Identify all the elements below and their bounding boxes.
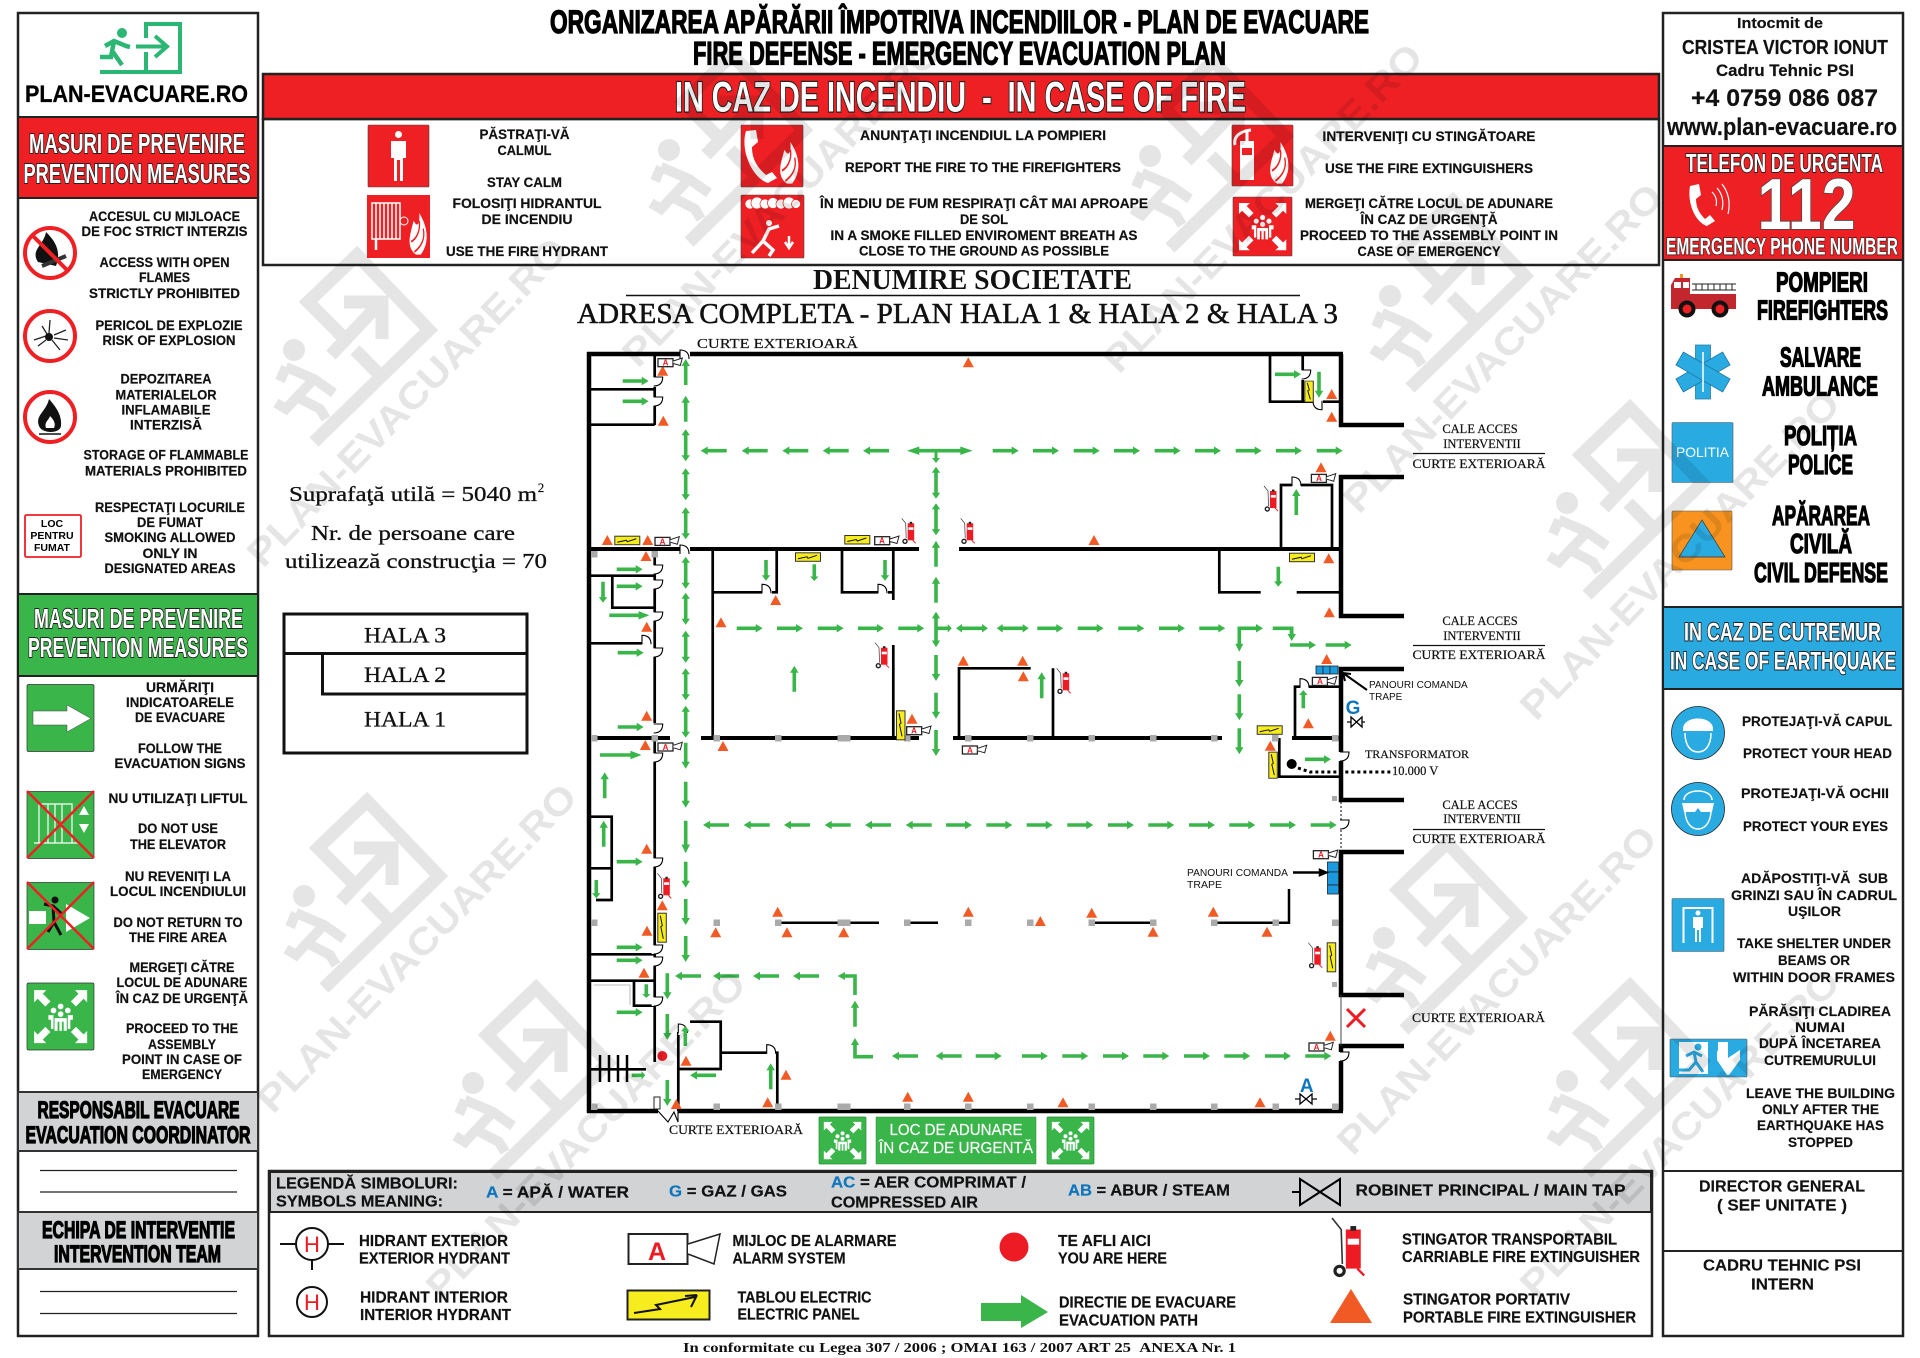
text: protect head — [1742, 714, 1892, 761]
watermark overlay: PLAN-EVACUARE.RO — [614, 30, 951, 375]
arrow to control panels right — [1343, 673, 1367, 690]
text: follow the signs: DE EVACUARE — [135, 710, 225, 725]
text: assembly: ÎN CAZ DE URGENŢĂ — [1360, 212, 1498, 227]
title: FIRE DEFENSE - EMERGENCY EVACUATION PLAN — [693, 36, 1226, 72]
label: access route 2: INTERVENTII — [1443, 629, 1521, 643]
text: follow the signs: URMĂRIŢI — [146, 680, 214, 695]
text: stay calm: STAY CALM — [487, 175, 562, 190]
text: portable extinguisher: STINGATOR PORTATIV — [1403, 1292, 1570, 1308]
alarm symbols: A — [660, 538, 666, 546]
text: leave building: NUMAI — [1795, 1020, 1845, 1035]
text: take shelter: GRINZI SAU ÎN CADRUL — [1731, 888, 1897, 903]
text: use hydrant: USE THE FIRE HYDRANT — [446, 244, 609, 259]
watermark overlay: PLAN-EVACUARE.RO — [418, 963, 755, 1308]
text: transportable extinguisher: CARRIABLE FIRE EXTINGUISHER — [1402, 1249, 1640, 1266]
label: access route 1: CALE ACCES — [1442, 422, 1518, 436]
text: leave building: CUTREMURULUI — [1764, 1053, 1876, 1068]
watermark overlay: PLAN-EVACUARE.RO — [1095, 36, 1432, 381]
text: open flames prohibited: STRICTLY PROHIBITED — [89, 286, 240, 301]
legend header text — [276, 1174, 1626, 1212]
text: assembly point: LOCUL DE ADUNARE — [116, 975, 248, 990]
text: stay calm — [480, 127, 570, 190]
text: interior hydrant: HIDRANT INTERIOR — [360, 1290, 508, 1306]
text: smoking areas: SMOKING ALLOWED — [104, 530, 236, 545]
alarm symbols: A — [967, 746, 973, 755]
text: building stats — [285, 480, 547, 573]
heading: earthquake — [1663, 607, 1903, 689]
text: interior hydrant — [360, 1290, 511, 1324]
label: bottom courtyard: CURTE EXTERIOARĂ — [669, 1122, 804, 1137]
alarm symbols: A — [1316, 474, 1322, 483]
text: open flames prohibited: ACCESS WITH OPEN — [100, 255, 230, 270]
assembly point banner: ÎN CAZ DE URGENTĂ — [878, 1140, 1034, 1157]
alarm symbols: A — [911, 726, 917, 736]
text: protect head: PROTECT YOUR HEAD — [1743, 746, 1892, 761]
icon: assembly sign left — [819, 1117, 866, 1164]
watermark overlay: PLAN-EVACUARE.RO — [1512, 961, 1849, 1306]
text: smoke guidance — [819, 196, 1148, 258]
icon: door frame — [1672, 898, 1724, 952]
icon: do not return — [27, 882, 94, 950]
text: police: POLICE — [1788, 449, 1853, 480]
panel: in case of fire — [263, 74, 1659, 265]
watermark overlay — [239, 30, 1849, 1308]
label: access route 3: CURTE EXTERIOARĂ — [1412, 832, 1546, 846]
heading: intervention team: ECHIPA DE INTERVENTIE — [42, 1217, 235, 1244]
icon: assembly point — [27, 983, 94, 1050]
icon: smoking place sign: LOC — [41, 518, 63, 530]
label: access route 1 — [1412, 422, 1546, 471]
signature lines: coordinator — [40, 1170, 237, 1192]
text: ambulance: SALVARE — [1780, 342, 1861, 372]
icon: electric panel — [628, 1290, 710, 1320]
author block: +4 0759 086 087 — [1691, 85, 1878, 112]
heading rule — [626, 294, 1300, 296]
text: transportable extinguisher: STINGATOR TRANSPORTABIL — [1402, 1232, 1617, 1248]
label: access route 2 — [1412, 614, 1546, 662]
text: flammable storage: INFLAMABILE — [122, 402, 210, 418]
text: use extinguishers — [1322, 129, 1536, 176]
logo: exit sign — [100, 24, 180, 72]
you are here dot — [657, 1051, 667, 1061]
section: director: DIRECTOR GENERAL — [1699, 1178, 1865, 1196]
text: smoke guidance: CLOSE TO THE GROUND AS POSSIBLE — [859, 244, 1109, 258]
text: do not return: THE FIRE AREA — [129, 930, 227, 945]
text: explosion risk: PERICOL DE EXPLOZIE — [96, 318, 242, 333]
icon: civil defense — [1672, 511, 1732, 570]
signature lines: team — [40, 1292, 237, 1314]
text: you are here: YOU ARE HERE — [1058, 1250, 1167, 1268]
text: ambulance — [1762, 342, 1878, 402]
heading: red prevention measures — [18, 117, 258, 198]
heading: green prevention measures — [18, 594, 258, 676]
valve: air — [1295, 1076, 1317, 1104]
label: access route 2: CALE ACCES — [1442, 614, 1518, 628]
label: access route 3 — [1412, 798, 1546, 846]
text: firefighters — [1757, 266, 1888, 326]
assembly point banner — [876, 1117, 1036, 1164]
text: portable extinguisher: PORTABLE FIRE EXTINGUISHER — [1403, 1310, 1636, 1326]
heading: intervention team: INTERVENTION TEAM — [54, 1241, 221, 1268]
text: use extinguishers: INTERVENIŢI CU STINGĂTOARE — [1322, 129, 1536, 144]
text: assembly: PROCEED TO THE ASSEMBLY POINT IN — [1300, 228, 1558, 243]
panel: legend — [269, 1171, 1652, 1336]
heading: green prevention measures: PREVENTION MEASURES — [28, 632, 248, 663]
icon: assembly sign right — [1047, 1117, 1094, 1164]
emergency phone block — [1663, 146, 1903, 260]
icon: flammable — [25, 392, 75, 442]
watermark overlay: PLAN-EVACUARE.RO — [1335, 176, 1672, 521]
text: portable extinguisher — [1403, 1292, 1636, 1326]
alarm symbols: A — [663, 358, 669, 368]
text: interior hydrant: INTERIOR HYDRANT — [360, 1307, 511, 1324]
text: assembly: MERGEŢI CĂTRE LOCUL DE ADUNARE — [1305, 196, 1553, 211]
author block — [1666, 16, 1897, 141]
author block: www.plan-evacuare.ro — [1666, 114, 1897, 141]
icon: exterior hydrant: H — [304, 1232, 320, 1257]
text: building stats: 2 — [538, 480, 544, 495]
transformer: TRANSFORMATOR — [1365, 747, 1469, 761]
text: exterior hydrant: HIDRANT EXTERIOR — [359, 1233, 508, 1250]
legend header text: A = APĂ / WATER — [486, 1182, 629, 1202]
text: police: POLIȚIA — [1784, 420, 1857, 451]
icon: phone — [741, 125, 803, 187]
text: take shelter: TAKE SHELTER UNDER — [1737, 936, 1891, 951]
heading: green prevention measures: MASURI DE PREVENIRE — [34, 603, 243, 634]
text: flammable storage — [84, 372, 248, 478]
text: do not return: LOCUL INCENDIULUI — [110, 884, 246, 899]
text: protect eyes: PROTEJAŢI-VĂ OCHII — [1741, 786, 1889, 801]
text: building stats: Nr. de persoane care — [311, 521, 515, 545]
heading: evacuation coordinator — [18, 1092, 258, 1151]
legend header bar — [270, 1172, 1651, 1212]
icon: main tap — [1292, 1179, 1340, 1205]
icon: evacuation arrow — [981, 1295, 1048, 1328]
text: you are here — [1058, 1233, 1167, 1268]
icon: police — [1672, 422, 1733, 482]
heading: red prevention measures: PREVENTION MEASURES — [24, 158, 250, 189]
text: leave building: EARTHQUAKE HAS — [1757, 1118, 1884, 1133]
address heading: ADRESA COMPLETA - PLAN HALA 1 & HALA 2 & HALA 3 — [577, 299, 1338, 330]
section: director — [1663, 1171, 1903, 1214]
valve: air: A — [1300, 1076, 1314, 1097]
legend header text: G = GAZ / GAS — [669, 1184, 787, 1200]
icon: exit down — [1670, 1039, 1747, 1077]
label: access route 3: INTERVENTII — [1443, 812, 1521, 826]
text: evacuation path: EVACUATION PATH — [1059, 1312, 1198, 1330]
icon: alarm: A — [648, 1238, 666, 1266]
text: flammable storage: DEPOZITAREA — [120, 372, 212, 386]
text: flammable storage: MATERIALS PROHIBITED — [85, 464, 247, 478]
emergency phone block: 112 — [1758, 165, 1856, 245]
icon: green arrow sign — [27, 684, 94, 752]
label: control panels right — [1369, 680, 1468, 703]
text: leave building: DUPĂ ÎNCETAREA — [1759, 1036, 1881, 1051]
icon: explosion risk — [25, 311, 75, 361]
legend header text: LEGENDĂ SIMBOLURI: — [276, 1174, 458, 1192]
text: take shelter — [1731, 871, 1897, 985]
red cross blocked exit — [1347, 1009, 1365, 1027]
icon: no open flames — [25, 228, 75, 278]
text: do not return: NU REVENIŢI LA — [125, 869, 231, 884]
icon: alarm — [628, 1234, 720, 1266]
label: access route 1: INTERVENTII — [1443, 437, 1521, 451]
text: electric panel: ELECTRIC PANEL — [738, 1306, 860, 1324]
text: alarm — [732, 1233, 897, 1268]
text: use hydrant: DE INCENDIU — [482, 212, 572, 227]
text: smoking areas: DE FUMAT — [137, 515, 204, 530]
text: stay calm: CALMUL — [498, 143, 552, 158]
watermark overlay: PLAN-EVACUARE.RO — [249, 776, 586, 1121]
floor plan doors — [642, 350, 1349, 1122]
icon: exterior hydrant — [280, 1228, 344, 1270]
text: open flames prohibited: DE FOC STRICT INTERZIS — [82, 224, 248, 239]
text: protect eyes — [1741, 786, 1889, 834]
text: smoke guidance: DE SOL — [960, 212, 1008, 227]
text: smoking areas — [95, 500, 245, 576]
heading: in case of fire band: IN CAZ DE INCENDIU - IN CASE OF FIRE — [675, 74, 1246, 122]
text: exterior hydrant — [359, 1233, 510, 1268]
text: electric panel: TABLOU ELECTRIC — [738, 1290, 872, 1306]
alarm symbols: A — [1318, 850, 1324, 860]
alarm symbols: A — [663, 743, 669, 752]
text: electric panel — [738, 1290, 872, 1324]
title — [550, 4, 1369, 72]
text: assembly point: EMERGENCY — [142, 1067, 222, 1082]
label: control panels left: TRAPE — [1187, 879, 1222, 891]
text: assembly point: ÎN CAZ DE URGENŢĂ — [115, 991, 248, 1006]
section: director: ( SEF UNITATE ) — [1717, 1198, 1847, 1214]
icon: smoke — [741, 195, 804, 258]
label: access route 1: CURTE EXTERIOARĂ — [1412, 457, 1546, 471]
icon: goggles — [1672, 782, 1724, 836]
assembly point banner: LOC DE ADUNARE — [890, 1122, 1022, 1139]
label: control panels left — [1187, 867, 1288, 891]
text: take shelter: UŞILOR — [1788, 904, 1841, 919]
diagram: hall layout: HALA 2 — [364, 662, 446, 687]
label: control panels right: TRAPE — [1369, 692, 1403, 703]
text: leave building: PĂRĂSIŢI CLADIREA — [1749, 1004, 1891, 1019]
legend header text: AB = ABUR / STEAM — [1068, 1182, 1230, 1200]
legend header text: AC = AER COMPRIMAT / — [831, 1174, 1027, 1192]
text: report fire: ANUNŢAŢI INCENDIUL LA POMPIERI — [860, 128, 1106, 143]
text: transportable extinguisher — [1402, 1232, 1640, 1266]
text: protect head: PROTEJAŢI-VĂ CAPUL — [1742, 714, 1892, 729]
watermark overlay: PLAN-EVACUARE.RO — [1512, 383, 1849, 728]
icon: police: POLITIA — [1676, 444, 1730, 460]
text: leave building: STOPPED — [1788, 1135, 1853, 1150]
text: smoke guidance: ÎN MEDIU DE FUM RESPIRAŢI CÂT MAI APROAPE — [819, 196, 1148, 211]
text: stay calm: PĂSTRAŢI-VĂ — [480, 127, 570, 142]
text: open flames prohibited — [82, 209, 248, 301]
text: police — [1784, 420, 1857, 480]
text: report fire: REPORT THE FIRE TO THE FIREFIGHTERS — [845, 160, 1121, 175]
text: assembly: CASE OF EMERGENCY — [1358, 244, 1500, 259]
heading: intervention team — [18, 1212, 258, 1269]
icon: star of life — [1676, 345, 1730, 399]
structural columns — [591, 551, 1338, 1110]
text: building stats: Suprafaţă utilă = 5040 m — [289, 482, 537, 506]
icon: smoking place sign: PENTRU — [30, 530, 74, 542]
icon: portable extinguisher — [1330, 1289, 1372, 1323]
text: exterior hydrant: EXTERIOR HYDRANT — [359, 1250, 510, 1268]
transformer: 10.000 V — [1392, 764, 1438, 778]
valve: gas: G — [1346, 698, 1360, 719]
text: use hydrant — [446, 196, 609, 259]
label: top courtyard: CURTE EXTERIOARĂ — [697, 335, 859, 352]
icon: interior hydrant — [297, 1287, 327, 1317]
text: do not use elevator — [108, 791, 248, 852]
heading: evacuation coordinator: EVACUATION COORDINATOR — [26, 1122, 250, 1149]
text: smoking areas: RESPECTAŢI LOCURILE — [95, 500, 245, 515]
label: control panels left: PANOURI COMANDA — [1187, 867, 1288, 879]
author block: Cadru Tehnic PSI — [1716, 62, 1854, 80]
panel: right sidebar — [1663, 13, 1903, 1336]
text: follow the signs: EVACUATION SIGNS — [114, 756, 246, 771]
text: assembly — [1300, 196, 1558, 259]
text: assembly point: MERGEŢI CĂTRE — [130, 960, 234, 975]
text: assembly point: POINT IN CASE OF — [122, 1052, 242, 1067]
icon: assembly red — [1233, 197, 1292, 256]
floor plan walls — [587, 352, 1404, 1113]
text: open flames prohibited: FLAMES — [139, 270, 190, 285]
icon: no elevator — [27, 791, 94, 858]
label: access route 3: CALE ACCES — [1442, 798, 1518, 812]
text: open flames prohibited: ACCESUL CU MIJLOACE — [89, 209, 240, 224]
icon: stay calm — [368, 125, 429, 187]
text: firefighters: POMPIERI — [1776, 266, 1868, 298]
text: do not return: DO NOT RETURN TO — [114, 915, 242, 930]
section: technical staff: CADRU TEHNIC PSI — [1703, 1258, 1861, 1274]
portable extinguisher triangles — [602, 357, 1337, 1109]
heading: evacuation coordinator: RESPONSABIL EVACUARE — [38, 1097, 239, 1124]
text: explosion risk: RISK OF EXPLOSION — [102, 333, 236, 348]
diagram: hall layout: HALA 3 — [364, 622, 446, 648]
icon: transportable extinguisher — [1332, 1218, 1364, 1276]
text: smoke guidance: IN A SMOKE FILLED ENVIROMENT BREATH AS — [830, 228, 1138, 243]
section: technical staff — [1663, 1251, 1903, 1294]
text: smoking areas: ONLY IN — [142, 546, 198, 561]
text: you are here: TE AFLI AICI — [1058, 1233, 1151, 1250]
electric panels — [615, 381, 1336, 972]
text: assembly point: ASSEMBLY — [148, 1037, 216, 1052]
text: use hydrant: FOLOSIŢI HIDRANTUL — [452, 196, 602, 211]
alarm symbols — [655, 358, 1338, 1052]
diagram: hall layout — [284, 614, 527, 753]
text: civil defense: CIVILĂ — [1790, 528, 1852, 559]
valve: gas — [1346, 698, 1365, 727]
text: do not use elevator: THE ELEVATOR — [130, 837, 226, 852]
label: control panels right: PANOURI COMANDA — [1369, 680, 1468, 691]
icon: interior hydrant: H — [304, 1290, 320, 1315]
icon: fire truck — [1671, 274, 1736, 316]
control panels right wall — [1328, 862, 1338, 894]
author block: CRISTEA VICTOR IONUT — [1682, 37, 1888, 59]
text: civil defense — [1754, 500, 1888, 588]
text: leave building — [1746, 1004, 1895, 1150]
logo text: PLAN-EVACUARE.RO — [25, 81, 248, 108]
icon: smoking place sign: FUMAT — [34, 542, 71, 554]
alarm symbols: A — [879, 536, 885, 546]
text: alarm: MIJLOC DE ALARMARE — [732, 1233, 897, 1250]
text: take shelter: ADĂPOSTIŢI-VĂ SUB — [1741, 871, 1888, 886]
text: follow the signs: FOLLOW THE — [138, 741, 222, 756]
text: flammable storage: STORAGE OF FLAMMABLE — [84, 448, 248, 462]
text: explosion risk — [96, 318, 242, 348]
text: smoking areas: DESIGNATED AREAS — [104, 561, 236, 576]
watermark overlay: PLAN-EVACUARE.RO — [1329, 818, 1666, 1163]
text: do not return — [110, 869, 246, 945]
alarm symbols: A — [1317, 677, 1323, 686]
title: ORGANIZAREA APĂRĂRII ÎMPOTRIVA INCENDIILOR - PLAN DE EVACUARE — [550, 4, 1369, 40]
chart: floor plan — [587, 335, 1546, 1137]
transformer — [1287, 747, 1469, 778]
text: leave building: LEAVE THE BUILDING — [1746, 1086, 1895, 1101]
text: follow the signs: INDICATOARELE — [126, 695, 234, 710]
text: evacuation path — [1059, 1294, 1236, 1330]
company name heading: DENUMIRE SOCIETATE — [813, 264, 1132, 296]
icon: you are here — [1000, 1232, 1028, 1262]
alarm symbols: A — [1314, 1043, 1320, 1052]
text: take shelter: WITHIN DOOR FRAMES — [1733, 970, 1895, 985]
icon: extinguisher sign — [1232, 125, 1293, 186]
legend header text: ROBINET PRINCIPAL / MAIN TAP — [1356, 1182, 1626, 1200]
control panels top — [1316, 666, 1338, 674]
text: assembly point — [115, 960, 248, 1082]
arrow to control panels left — [1293, 870, 1326, 875]
text: leave building: ONLY AFTER THE — [1762, 1102, 1879, 1117]
legend header text: SYMBOLS MEANING: — [276, 1194, 443, 1210]
panel: left sidebar — [18, 13, 258, 1336]
text: use extinguishers: USE THE FIRE EXTINGUISHERS — [1325, 161, 1533, 176]
diagram: hall layout: HALA 1 — [364, 706, 446, 732]
evacuation path arrows — [592, 359, 1352, 1106]
text: assembly point: PROCEED TO THE — [126, 1021, 238, 1036]
text: alarm: ALARM SYSTEM — [732, 1250, 846, 1268]
label: courtyard right: CURTE EXTERIOARĂ — [1412, 1011, 1545, 1025]
text: do not use elevator: DO NOT USE — [138, 821, 218, 836]
text: take shelter: BEAMS OR — [1778, 953, 1850, 968]
section: technical staff: INTERN — [1751, 1276, 1814, 1294]
footer legal note: In conformitate cu Legea 307 / 2006 ; OMAI 163 / 2007 ART 25 ANEXA Nr. 1 — [683, 1341, 1236, 1356]
icon: fire hydrant — [367, 195, 430, 258]
text: flammable storage: MATERIALELOR — [116, 388, 217, 402]
author block: Intocmit de — [1737, 16, 1823, 32]
icon: helmet — [1672, 706, 1724, 760]
text: building stats: utilizează construcţia = 70 — [285, 549, 547, 573]
heading: in case of fire band — [263, 74, 1659, 122]
legend header text: COMPRESSED AIR — [831, 1194, 978, 1212]
transportable extinguishers — [654, 486, 1322, 1109]
icon: smoking place sign — [25, 515, 81, 557]
text: protect eyes: PROTECT YOUR EYES — [1743, 819, 1888, 834]
text: follow the signs — [114, 680, 246, 771]
text: do not use elevator: NU UTILIZAŢI LIFTUL — [108, 791, 248, 806]
text: report fire — [845, 128, 1121, 175]
text: flammable storage: INTERZISĂ — [130, 418, 202, 432]
heading: red prevention measures: MASURI DE PREVENIRE — [29, 128, 245, 159]
text: evacuation path: DIRECTIE DE EVACUARE — [1059, 1294, 1236, 1312]
watermark overlay: PLAN-EVACUARE.RO — [239, 230, 576, 575]
label: access route 2: CURTE EXTERIOARĂ — [1412, 648, 1546, 662]
